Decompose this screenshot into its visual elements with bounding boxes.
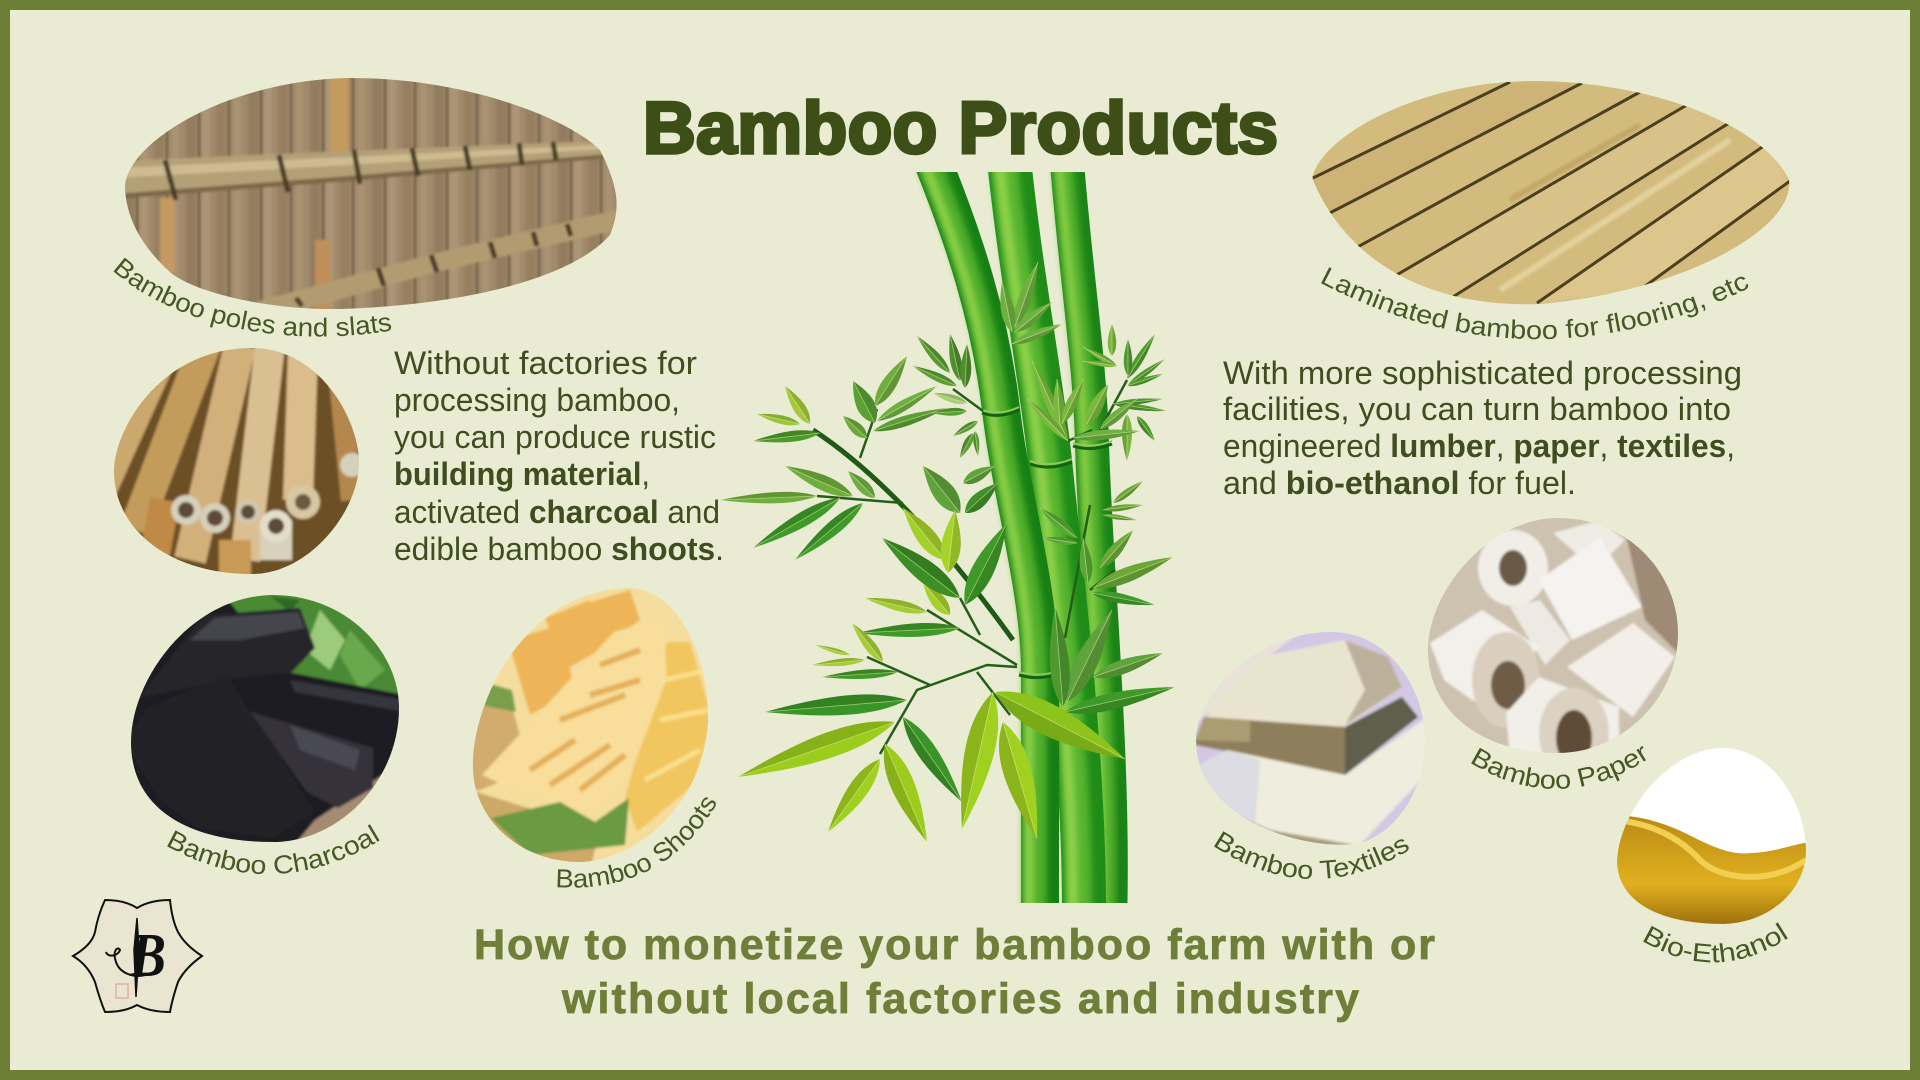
text: sophisticated processing: engineered lumber, paper, textiles, [1223, 428, 1735, 464]
text: sophisticated processing [1223, 355, 1742, 501]
text: sophisticated processing: facilities, you can turn bamboo into [1223, 391, 1731, 427]
photo: bamboo textiles [1190, 625, 1430, 850]
photo: bamboo paper rolls [1428, 518, 1678, 753]
text: without factories [394, 345, 724, 567]
text: sophisticated processing: and bio-ethanol for fuel. [1223, 465, 1576, 501]
label: bamboo paper: Bamboo Paper [1471, 746, 1646, 789]
subtitle: How to monetize your bamboo farm with or [474, 921, 1435, 969]
label: bio-ethanol: Bio-Ethanol [1643, 922, 1788, 962]
label: bamboo poles and slats: Bamboo poles and slats [114, 258, 392, 337]
text: sophisticated processing: With more sophisticated processing [1223, 355, 1742, 391]
photo: bio-ethanol [1617, 748, 1806, 924]
text: without factories: you can produce rustic [394, 419, 716, 455]
text: without factories: processing bamboo, [394, 382, 680, 418]
photo: bamboo shoots [468, 580, 713, 870]
subtitle [474, 921, 1435, 1023]
label: laminated bamboo for flooring: Laminated bamboo for flooring, etc [1321, 267, 1748, 340]
photo: bamboo canes [114, 348, 359, 574]
text: without factories: activated charcoal and [394, 494, 720, 530]
label: bamboo shoots: Bamboo Shoots [558, 797, 716, 888]
logo: lotus B emblem [73, 900, 202, 1012]
subtitle: without local factories and industry [561, 975, 1359, 1023]
label: bamboo charcoal: Bamboo Charcoal [167, 824, 380, 874]
photo: laminated bamboo flooring [1305, 75, 1795, 310]
label: bamboo textiles: Bamboo Textiles [1214, 831, 1409, 879]
photo: bamboo poles and slats wall [115, 70, 625, 315]
logo: lotus B emblem: B [129, 922, 166, 990]
text: without factories: edible bamboo shoots. [394, 531, 724, 567]
text: without factories: Without factories for [394, 345, 697, 381]
text: without factories: building material, [394, 456, 650, 492]
photo: bamboo charcoal [125, 590, 405, 850]
title: Bamboo Products [643, 88, 1278, 169]
illustration: bamboo plant [720, 150, 1177, 920]
